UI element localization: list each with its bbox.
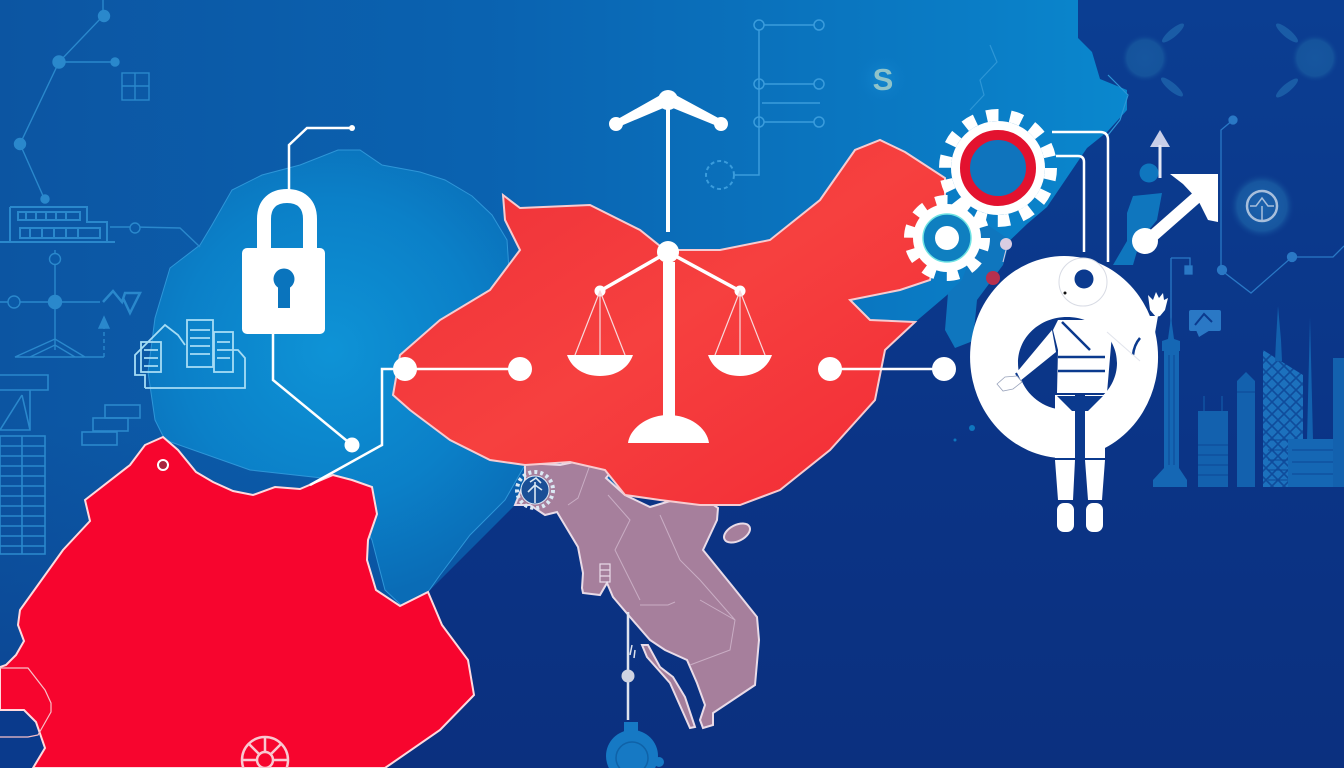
balance antenna — [609, 90, 728, 232]
icon: small gear — [909, 200, 985, 276]
icon: large gear — [945, 115, 1051, 221]
map: bottom-left red territory — [0, 437, 474, 768]
map pins — [986, 238, 1012, 285]
icon: peninsula ladder — [600, 564, 610, 582]
top centre circuit — [706, 20, 824, 189]
right circuit network — [1171, 116, 1344, 330]
icon: glowing coin — [855, 51, 911, 107]
map: central red territory — [393, 140, 945, 505]
icon: robot in ring — [970, 256, 1168, 532]
right connector nodes — [818, 357, 956, 381]
bottom connector with node — [622, 612, 635, 720]
icon: city documents — [135, 320, 245, 388]
icon: glowing coin: S — [873, 62, 893, 97]
left connector nodes — [310, 357, 532, 485]
icon: left government building — [0, 207, 115, 242]
icon: gear tree emblem — [517, 472, 553, 508]
icon: message card — [1189, 310, 1221, 337]
arrow: small up — [1150, 130, 1170, 178]
icon: left tower and stairs — [0, 375, 140, 554]
gear connectors — [1052, 132, 1108, 262]
map: southeast Asia territory — [515, 455, 759, 728]
islands — [945, 164, 1162, 442]
coastline rivers — [970, 45, 1128, 135]
scale of justice — [567, 241, 772, 443]
arrow: growth — [1132, 174, 1218, 254]
icon: bottom blue gear — [606, 722, 664, 768]
left circuit network — [0, 0, 200, 357]
map: blue territory — [148, 150, 525, 606]
city skyline — [1153, 306, 1344, 487]
icon: top right propellers — [1121, 21, 1339, 100]
icon: padlock — [242, 125, 360, 452]
icon: glowing target — [1229, 173, 1295, 239]
